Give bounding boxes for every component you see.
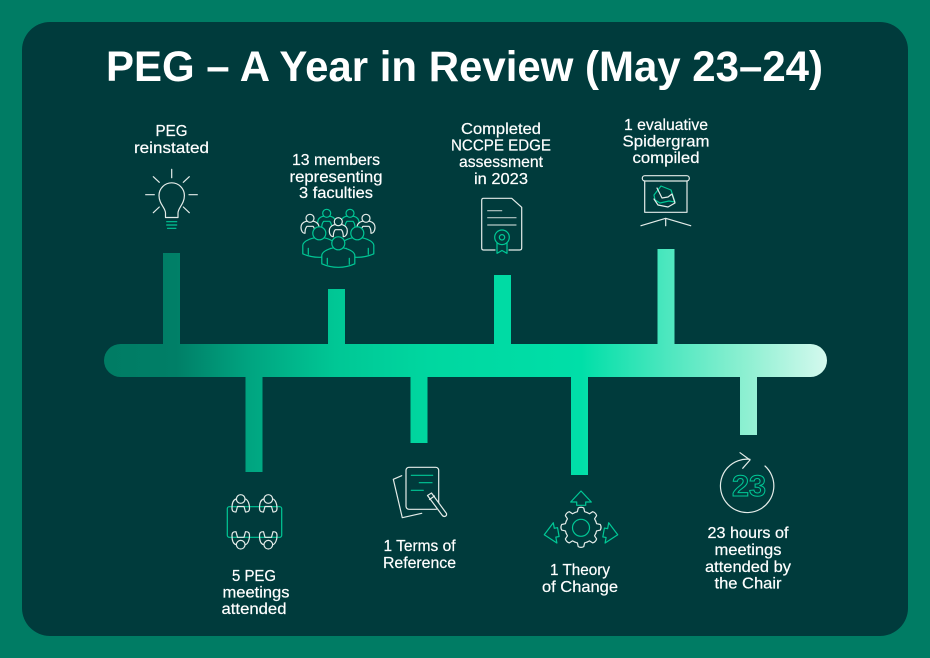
- milestone: Theory of Change: [542, 491, 620, 596]
- label: 5 PEG meetings attended: meetings: [222, 584, 290, 602]
- icon: circular arrow with 23: 23: [732, 470, 766, 503]
- icon: group of people: [301, 209, 375, 267]
- label: PEG reinstated: reinstated: [134, 140, 209, 157]
- label: 23 hours of meetings attended by the Chair: attended by: [705, 559, 791, 576]
- icon: light bulb: [146, 169, 197, 228]
- label: 23 hours of meetings attended by the Chair: the Chair: [714, 576, 782, 592]
- label: 1 Terms of Reference: [383, 538, 456, 572]
- label: Completed NCCPE EDGE assessment in 2023: Completed: [461, 121, 541, 138]
- label: 1 evaluative Spidergram compiled: [622, 117, 710, 167]
- icon: certificate document: [482, 198, 522, 253]
- timeline: bar and stems: [104, 249, 827, 475]
- label: 13 members representing 3 faculties: [290, 152, 382, 202]
- label: 1 evaluative Spidergram compiled: Spidergram: [622, 134, 710, 150]
- icon: meeting table: [227, 495, 282, 549]
- label: 1 Terms of Reference: 1 Terms of: [384, 538, 456, 555]
- label: Completed NCCPE EDGE assessment in 2023: assessment: [459, 154, 544, 171]
- milestone: NCCPE EDGE: [451, 121, 551, 253]
- label: Completed NCCPE EDGE assessment in 2023: NCCPE EDGE: [451, 138, 551, 154]
- label: 5 PEG meetings attended: [222, 568, 290, 618]
- label: 23 hours of meetings attended by the Chair: [705, 525, 791, 592]
- label: 1 Theory of Change: [542, 562, 618, 596]
- milestone: PEG reinstated: [134, 123, 209, 228]
- title: PEG – A Year in Review (May 23–24): [106, 43, 823, 91]
- label: 1 Terms of Reference: Reference: [383, 555, 456, 572]
- icon: document and pen: [393, 467, 447, 518]
- milestone: Terms of Reference: [383, 467, 456, 572]
- label: 1 evaluative Spidergram compiled: 1 evaluative: [624, 117, 708, 134]
- label: 1 Theory of Change: of Change: [542, 579, 618, 596]
- label: Completed NCCPE EDGE assessment in 2023: [451, 121, 551, 188]
- label: PEG reinstated: PEG: [156, 123, 188, 140]
- label: 5 PEG meetings attended: attended: [222, 601, 286, 618]
- milestone: 23 hours: [705, 453, 791, 592]
- label: 1 evaluative Spidergram compiled: compiled: [632, 150, 700, 167]
- label: 13 members representing 3 faculties: 3 faculties: [299, 185, 373, 202]
- label: 5 PEG meetings attended: 5 PEG: [232, 568, 276, 585]
- label: 13 members representing 3 faculties: representing: [290, 169, 382, 186]
- label: 13 members representing 3 faculties: 13 members: [292, 152, 380, 169]
- label: 1 Theory of Change: 1 Theory: [550, 562, 610, 579]
- label: 23 hours of meetings attended by the Chair: 23 hours of: [708, 525, 789, 542]
- label: Completed NCCPE EDGE assessment in 2023: in 2023: [474, 171, 528, 188]
- icon: gear with arrows: [542, 491, 620, 547]
- milestone: Spidergram: [622, 117, 710, 226]
- milestone: 13 members: [290, 152, 382, 267]
- milestone: 5 PEG meetings: [222, 495, 290, 618]
- label: PEG reinstated: [134, 123, 209, 157]
- icon: presentation board with spidergram: [641, 176, 691, 226]
- label: 23 hours of meetings attended by the Chair: meetings: [714, 542, 782, 559]
